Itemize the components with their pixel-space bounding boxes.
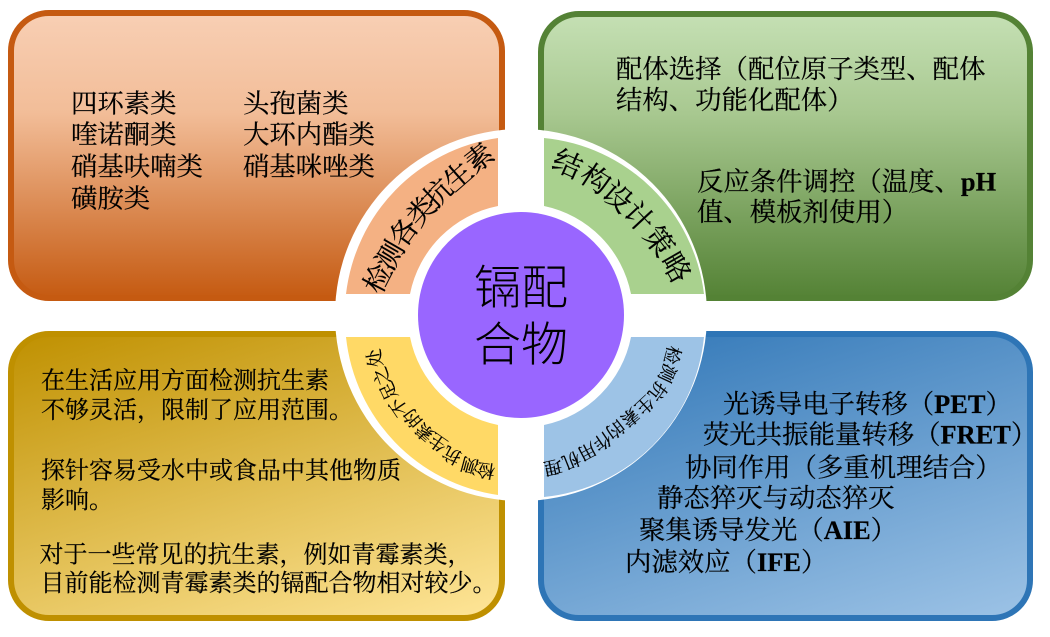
segment label: 结 bbox=[547, 144, 587, 186]
design strategies text: 反应条件调控（温度、pH bbox=[697, 166, 997, 196]
antibiotic classes list: 大环内酯类 bbox=[243, 120, 375, 150]
mechanisms text: 静态猝灭与动态猝灭 bbox=[657, 483, 895, 513]
segment label: 作 bbox=[589, 428, 615, 454]
shortcomings text: 对于一些常见的抗生素，例如青霉素类， bbox=[40, 542, 472, 568]
segment label: 生 bbox=[425, 429, 451, 455]
segment label: 之 bbox=[370, 364, 394, 388]
segment label: 足 bbox=[376, 379, 402, 403]
shortcomings text: 探针容易受水中或食品中其他物质 bbox=[41, 458, 401, 484]
segment label bbox=[358, 137, 501, 299]
mechanisms text: 聚集诱导发光（AIE） bbox=[639, 515, 897, 545]
antibiotic classes list: 头孢菌类 bbox=[243, 88, 349, 118]
segment label: 检 bbox=[358, 259, 399, 299]
antibiotic classes list: 喹诺酮类 bbox=[71, 120, 177, 150]
white ring bbox=[505, 0, 538, 637]
shortcomings text: 目前能检测青霉素类的镉配合物相对较少。 bbox=[40, 570, 496, 597]
segment label: 检 bbox=[660, 344, 684, 366]
segment label: 生 bbox=[438, 155, 480, 198]
mechanisms text: 内滤效应（IFE） bbox=[625, 547, 827, 577]
segment: shortcomings bbox=[346, 337, 498, 495]
segment label: 测 bbox=[370, 236, 411, 276]
segment label: 的 bbox=[400, 405, 426, 431]
segment label: 检 bbox=[476, 459, 496, 481]
segment label: 生 bbox=[631, 392, 657, 418]
segment label: 素 bbox=[617, 404, 643, 430]
segment label: 不 bbox=[386, 394, 412, 420]
segment label: 构 bbox=[574, 158, 616, 201]
segment label: 抗 bbox=[439, 442, 465, 468]
segment label: 的 bbox=[602, 416, 628, 442]
center label: 镉配 bbox=[474, 261, 568, 314]
segment label: 素 bbox=[459, 137, 501, 180]
panel: shortcomings bbox=[11, 334, 502, 618]
antibiotic classes list: 硝基呋喃类 bbox=[71, 152, 203, 182]
segment label bbox=[542, 344, 684, 479]
segment label: 机 bbox=[559, 447, 583, 473]
segment label: 类 bbox=[400, 191, 443, 233]
design strategies text: 配体选择（配位原子类型、配体 bbox=[616, 54, 985, 84]
segment: structure strategy bbox=[544, 138, 704, 294]
shortcomings text: 影响。 bbox=[41, 487, 113, 514]
design strategies text: 结构、功能化配体） bbox=[616, 85, 854, 115]
segment label: 测 bbox=[654, 361, 680, 385]
segment label: 策 bbox=[636, 220, 680, 263]
segment label bbox=[547, 144, 697, 289]
segment label: 素 bbox=[412, 419, 438, 445]
panel: antibiotic classes bbox=[11, 13, 502, 298]
antibiotic classes list bbox=[71, 88, 375, 214]
segment: detect antibiotics bbox=[346, 137, 501, 299]
segment label: 各 bbox=[383, 212, 426, 253]
segment label: 略 bbox=[654, 247, 697, 289]
segment label: 测 bbox=[459, 453, 481, 477]
segment label: 抗 bbox=[644, 378, 670, 404]
segment label: 处 bbox=[364, 347, 386, 369]
panel: mechanisms bbox=[541, 334, 1037, 618]
antibiotic classes list: 硝基咪唑类 bbox=[243, 152, 375, 182]
mechanisms text: 光诱导电子转移（PET） bbox=[723, 389, 1012, 419]
shortcomings text bbox=[40, 368, 496, 597]
antibiotic classes list: 磺胺类 bbox=[71, 184, 150, 214]
center label line 2: 合物 bbox=[474, 318, 568, 371]
center circle bbox=[418, 212, 624, 418]
antibiotic classes list: 四环素类 bbox=[71, 88, 177, 118]
segment label: 计 bbox=[616, 196, 660, 240]
mechanisms text: 荧光共振能量转移（FRET） bbox=[703, 420, 1037, 450]
segment label bbox=[364, 347, 496, 481]
design strategies text bbox=[616, 54, 997, 227]
design strategies text: 值、模板剂使用） bbox=[697, 197, 908, 227]
shortcomings text: 在生活应用方面检测抗生素 bbox=[41, 368, 329, 394]
segment label: 抗 bbox=[417, 172, 460, 215]
panel: design strategies bbox=[541, 14, 1030, 298]
shortcomings text: 不够灵活，限制了应用范围。 bbox=[41, 397, 353, 424]
segment: mechanisms bbox=[542, 337, 704, 497]
segment label: 设 bbox=[596, 176, 638, 220]
segment label: 理 bbox=[542, 455, 564, 479]
mechanisms text: 协同作用（多重机理结合） bbox=[685, 452, 1002, 482]
segment label: 用 bbox=[574, 438, 600, 464]
mechanisms text bbox=[625, 389, 1037, 577]
